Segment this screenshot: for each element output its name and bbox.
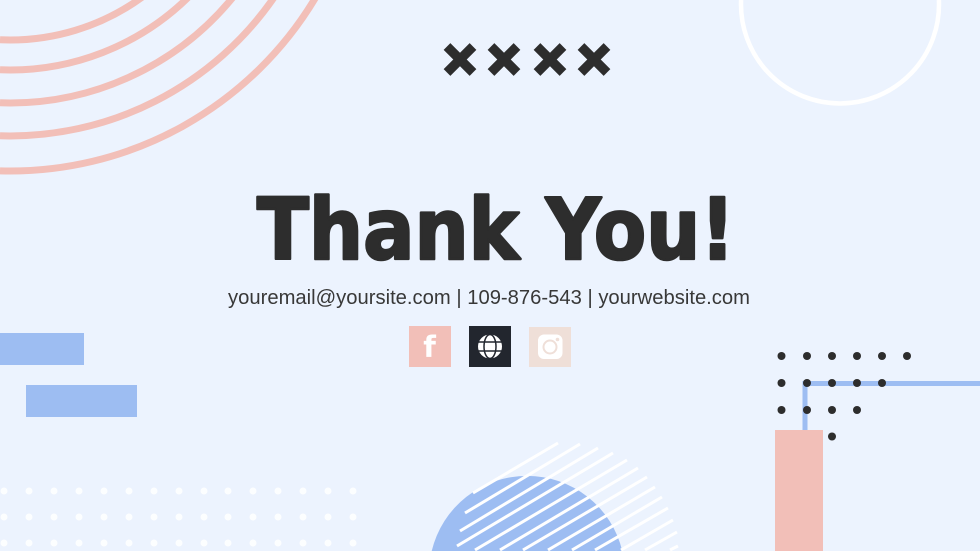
icon: instagram [529,327,571,367]
contact line: youremail@yoursite.com | 109-876-543 | yourwebsite.com [228,287,750,309]
white ring, top right [741,0,939,103]
blue bar, lower [26,385,137,417]
white dot grid, bottom left [0,488,356,546]
blue circle, bottom centre [432,476,622,551]
concentric pink arcs, top left [0,0,316,171]
white diagonal hatch lines [457,443,678,550]
pink rectangle [775,430,823,551]
icon: facebook [409,326,451,367]
icon: facebook: f [423,330,436,364]
blue bar, upper [0,333,84,365]
four cross marks [447,46,607,72]
blue corner line [805,384,980,432]
dark dot grid [778,352,911,440]
icon: globe [469,326,511,367]
title: Thank You! [257,181,735,280]
